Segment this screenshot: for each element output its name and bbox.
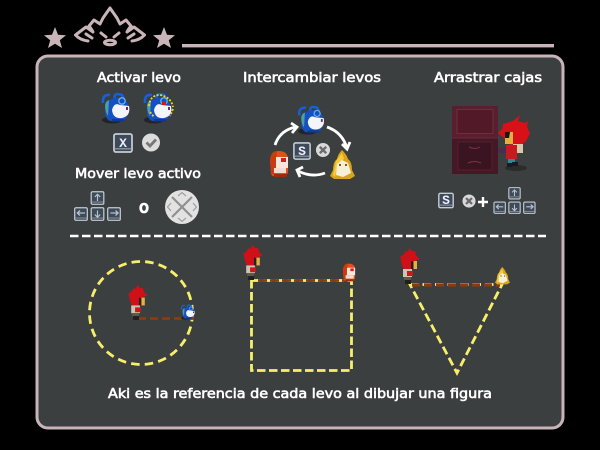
heading: intercambiar levos: Intercambiar levos (243, 71, 381, 86)
header rule (182, 44, 554, 47)
heading: mover levo activo: Mover levo activo (75, 167, 201, 182)
keys: arrows left group (75, 192, 120, 220)
main panel (37, 56, 563, 428)
icon: blue levo activated (144, 94, 173, 124)
header star right (153, 27, 175, 48)
icon: plus sign (478, 197, 488, 207)
key: X (114, 134, 132, 152)
key: S drag (439, 193, 453, 208)
icon: directional pad (165, 190, 199, 224)
header star left (44, 27, 66, 48)
diagram: square (243, 245, 355, 370)
caption: Aki es la referencia de cada levo al dibujar una figura (108, 387, 492, 402)
text: separator o: O (139, 202, 149, 217)
icon: cross button drag (462, 194, 476, 208)
icon: cross button (316, 143, 330, 157)
icon: orange levo (270, 151, 288, 177)
icon: blue levo (102, 94, 129, 124)
crates (452, 106, 498, 174)
icon: check button (142, 134, 160, 152)
heading: arrastrar cajas: Arrastrar cajas (434, 71, 542, 86)
diagram: triangle (400, 248, 510, 373)
keys: arrows right group (494, 188, 535, 213)
icon: blue levo in cycle (298, 107, 324, 135)
heading: activar levo: Activar levo (97, 71, 181, 86)
character: hero pushing (498, 115, 530, 171)
icon: yellow levo (330, 150, 355, 179)
key: S swap: S (298, 144, 306, 159)
arrows: cycle (275, 123, 350, 177)
diagram: circle (90, 262, 195, 364)
key: S swap (294, 143, 310, 159)
key: S drag: S (442, 193, 450, 208)
header crown ornament (76, 8, 144, 45)
divider (70, 235, 546, 237)
key: X: X (119, 136, 127, 151)
